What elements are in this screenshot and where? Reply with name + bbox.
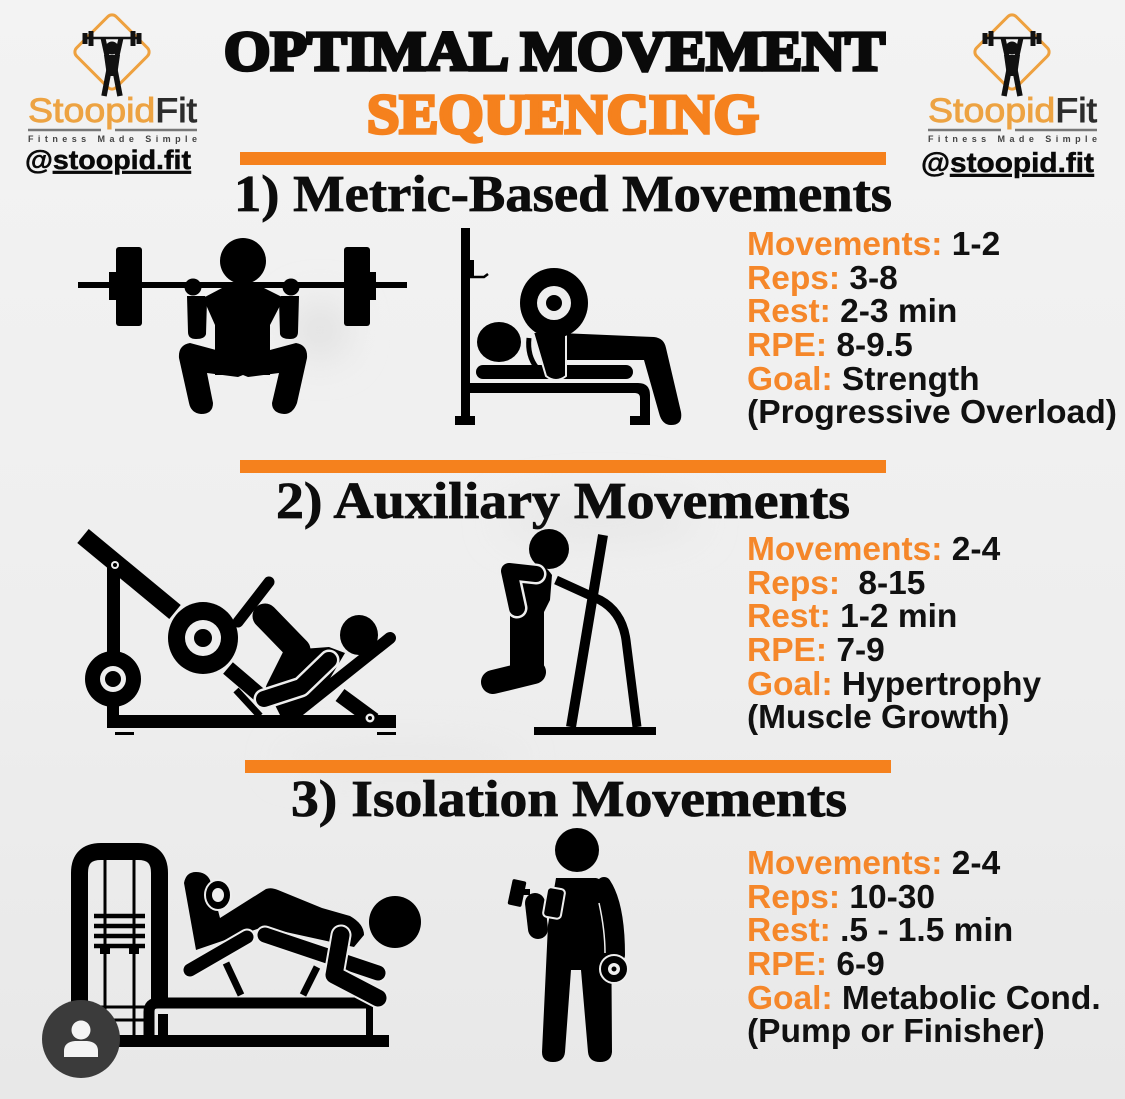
text block: isolation stats: (Pump or Finisher)	[747, 1013, 1045, 1050]
icon: leg curl machine	[80, 852, 421, 1047]
text block: auxiliary stats: (Muscle Growth)	[747, 699, 1009, 736]
text block: metric-based stats: Reps: 3-8	[747, 260, 898, 297]
heading 3: 3) Isolation Movements	[291, 771, 847, 828]
logo: left StoopidFit	[28, 12, 198, 144]
text block: isolation stats: Goal: Metabolic Cond.	[747, 980, 1101, 1017]
logo: left StoopidFit: Fitness Made Simple	[28, 134, 197, 144]
divider 2	[240, 460, 886, 473]
text block: metric-based stats: Rest: 2-3 min	[747, 293, 957, 330]
text block: auxiliary stats	[747, 531, 1041, 736]
text block: isolation stats: Movements: 2-4	[747, 845, 1001, 882]
divider 1	[240, 152, 886, 165]
brand name: Stoopid Fit	[928, 92, 1098, 130]
text block: auxiliary stats: Goal: Hypertrophy	[747, 666, 1041, 703]
handle: left: @stoopid.fit	[25, 145, 191, 175]
divider 3	[245, 760, 891, 773]
text block: metric-based stats: Movements: 1-2	[747, 226, 1000, 263]
text block: auxiliary stats: Movements: 2-4	[747, 531, 1001, 568]
heading 2: 2) Auxiliary Movements	[276, 473, 850, 530]
text block: isolation stats	[747, 845, 1101, 1050]
icon: dumbbell curl figure	[507, 828, 628, 1062]
heading 1: 1) Metric-Based Movements	[234, 166, 892, 223]
title: OPTIMAL MOVEMENT	[224, 21, 885, 83]
text block: auxiliary stats: Reps: 8-15	[747, 565, 925, 602]
brand name: Stoopid Fit	[28, 92, 198, 130]
icon: leg press machine	[83, 536, 396, 735]
icon: lat pulldown machine	[493, 529, 656, 735]
logo: right StoopidFit: Fitness Made Simple	[928, 134, 1097, 144]
text block: metric-based stats	[747, 226, 1117, 431]
subtitle: SEQUENCING	[367, 84, 759, 146]
text block: metric-based stats: (Progressive Overload)	[747, 394, 1117, 431]
text block: metric-based stats: RPE: 8-9.5	[747, 327, 913, 364]
icon: barbell squat	[78, 238, 407, 414]
text block: metric-based stats: Goal: Strength	[747, 361, 980, 398]
text block: isolation stats: Rest: .5 - 1.5 min	[747, 912, 1013, 949]
text block: auxiliary stats: RPE: 7-9	[747, 632, 885, 669]
logo: right StoopidFit	[928, 12, 1098, 144]
icon: profile badge	[42, 1000, 120, 1078]
text block: auxiliary stats: Rest: 1-2 min	[747, 598, 957, 635]
text block: isolation stats: RPE: 6-9	[747, 946, 885, 983]
icon: bench press	[455, 228, 681, 425]
handle: right: @stoopid.fit	[921, 147, 1094, 178]
text block: isolation stats: Reps: 10-30	[747, 879, 935, 916]
